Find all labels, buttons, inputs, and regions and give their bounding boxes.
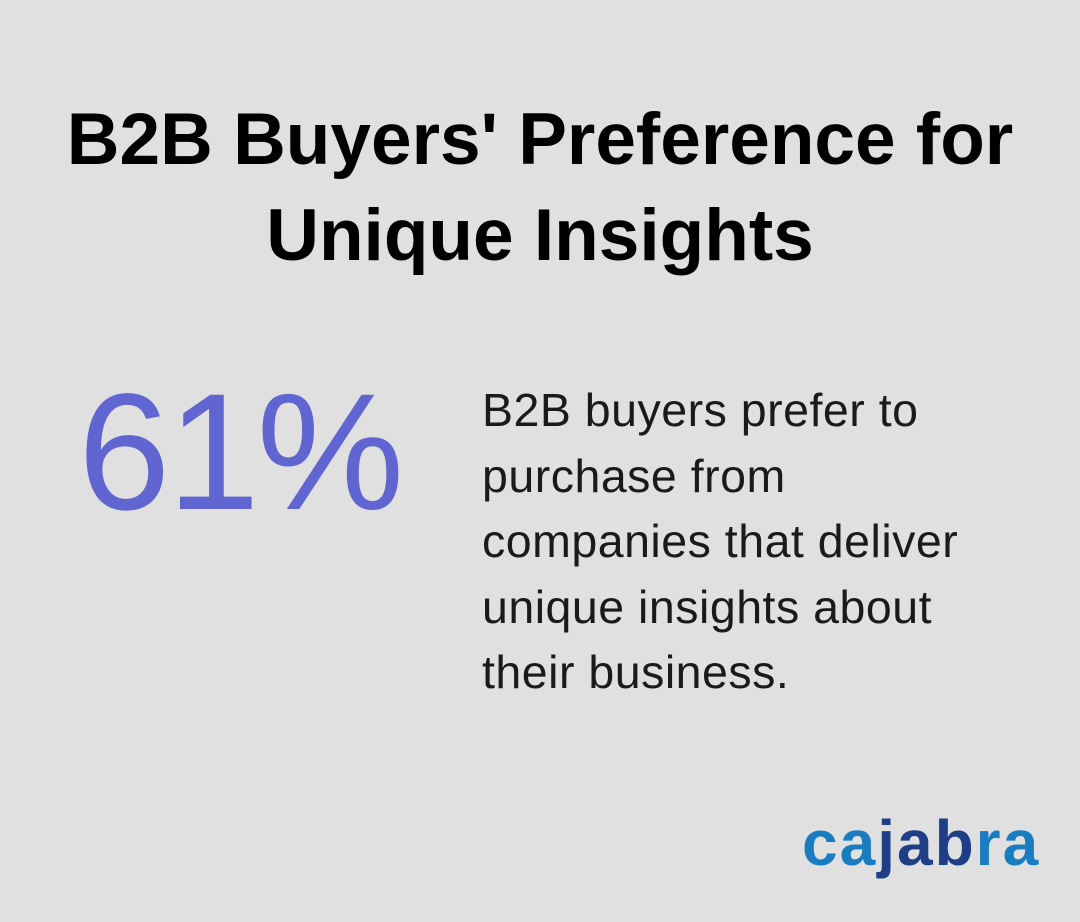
description text: companies that deliver [482,515,958,567]
statistic: 61%: 61% [78,360,401,545]
description text: purchase from [482,450,786,502]
description text: unique insights about [482,580,932,632]
description text: their business. [482,646,789,698]
title: B2B Buyers' Preference for [67,99,1013,180]
description text [482,384,958,698]
title: Unique Insights [266,195,814,276]
description text: B2B buyers prefer to [482,384,918,436]
logo: cajabra: cajabra [802,807,1040,879]
title [67,99,1013,276]
